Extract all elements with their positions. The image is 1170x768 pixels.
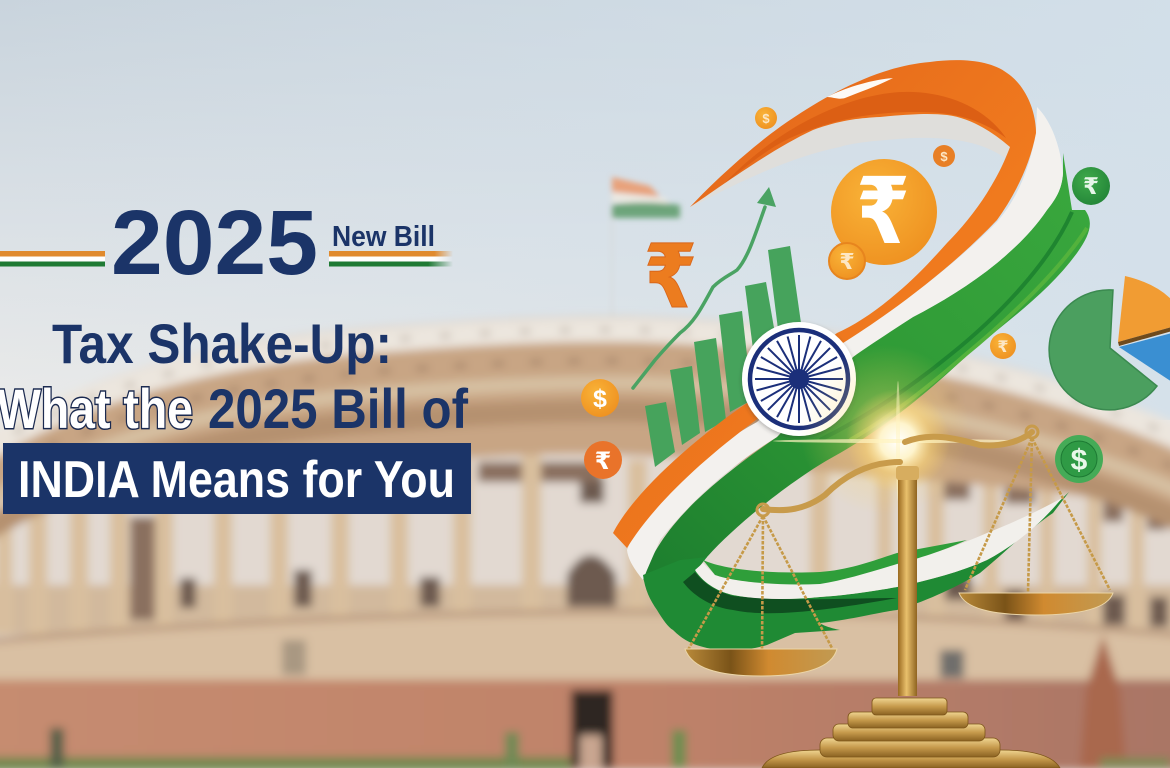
icon: green dollar coin: $ [1071,444,1088,477]
scale: beam [763,432,1032,510]
icon: large rupee coin [831,159,937,265]
ribbon: green stripe above white [703,540,967,585]
icon: rupee coin left [584,441,622,479]
ribbon: grey underside [690,110,1013,208]
ribbon: lower white stripe [695,498,1062,599]
ribbon: green upper band [643,153,1090,595]
scale: left pan [685,649,837,676]
right tricolor rule [329,251,453,266]
ribbon: lower green sweep [643,492,1069,650]
title block [0,192,471,514]
icon: Ashoka Chakra medallion [742,322,856,436]
scale: base tiers [762,698,1060,768]
arrow: green trend line [633,187,776,388]
scale: right chains [965,438,1110,592]
glow: scale highlight [773,345,1023,515]
icon: dollar coin center [933,145,955,167]
ribbon: orange dark fold [725,92,1006,183]
wall behind columns [0,450,1170,640]
bar chart: rising green bars [645,246,802,467]
ribbon: white band [627,107,1063,580]
icon: green rupee coin: ₹ [1083,173,1099,199]
left tricolor rule [0,251,105,266]
scale: right pan [959,593,1113,615]
icon: small rupee coin right: ₹ [997,339,1009,356]
ribbon: green fold shading [820,212,1087,440]
icon: dollar coin top: $ [762,111,770,126]
heading: What the: What the [0,377,193,440]
scale: pole [896,466,919,696]
icon: orange rupee symbol: ₹ [644,227,697,326]
icon: green rupee coin [1072,167,1110,205]
columns [0,455,1144,635]
icon: large rupee coin: ₹ [856,161,910,263]
icon: dollar coin top [755,107,777,129]
heading: 2025: 2025 [111,192,318,294]
icon: rupee coin left: ₹ [595,448,611,475]
ribbon: orange band [613,60,1036,548]
pie chart [1049,276,1170,410]
icon: small rupee coin near big coin [829,243,865,279]
scale: beam pivots [757,426,1038,516]
drum roof mass [0,317,1170,515]
icon: green dollar coin [1055,435,1103,483]
heading: 2025 Bill of: 2025 Bill of [208,377,468,440]
label: New Bill: New Bill [332,221,435,253]
heading: Tax Shake-Up: Tax Shake-Up: [52,312,392,375]
background: blurred flag on pole [611,177,680,320]
scale of justice [685,426,1113,768]
banner: INDIA Means for You: INDIA Means for You [18,451,455,509]
plinth bands [0,612,1170,690]
background: blurred parliament building [0,317,1170,768]
ribbon: tricolor swoosh [613,60,1090,650]
icon: dollar coin center: $ [940,149,948,164]
icon: dollar coin left: $ [593,385,607,413]
icon: dollar coin left [581,379,619,417]
scale: left chains [688,516,833,652]
icon: small rupee coin right [990,333,1016,359]
ribbon: white fleck [827,78,893,99]
icon: small rupee coin near big coin: ₹ [839,249,855,274]
ribbon: lower dark shadow [683,572,897,613]
